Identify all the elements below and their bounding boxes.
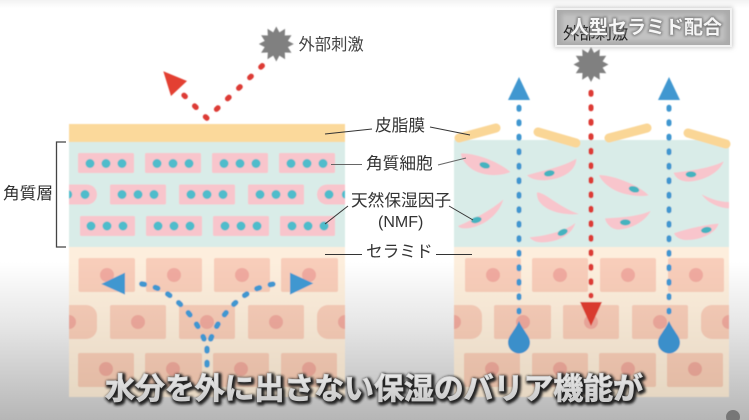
broken sebum pieces [459,128,726,144]
ceramide base layer [454,247,729,397]
label: sebum film: 皮脂膜 [375,116,425,135]
arrow: water escaping right [658,77,680,312]
label: external stimulus: 外部刺激 [298,36,364,54]
lower skin cells [69,258,345,387]
leader lines [325,127,473,254]
lower skin cells [454,258,729,387]
channel logo [726,410,740,420]
arrow: water escaping left [508,77,530,312]
badge: human-type ceramide: 外部刺激 [563,25,628,43]
ceramide base layer [69,247,345,397]
badge: human-type ceramide: 人型セラミド配合 [570,16,722,38]
caption: 水分を外に出さない保湿のバリア機能が [106,374,644,408]
icon: external stimulus star [259,26,294,62]
badge: human-type ceramide [554,7,733,48]
corneocyte cells with NMF dots [69,153,345,236]
stratum corneum layer [454,140,729,247]
arrow: external stimulus reflected [163,66,262,118]
panel shade [69,262,345,397]
panel shade [454,262,729,397]
label: corneocyte: 角質細胞 [366,154,433,173]
icon: external stimulus star right [574,47,608,82]
icon: water drop left [508,321,530,354]
panel: right skin diagram [454,47,729,397]
sebum layer [69,124,345,142]
label: NMF: (NMF) [378,214,423,231]
bracket: stratum corneum [56,142,66,247]
arrow: external stimulus entering [580,92,602,326]
bottom gradient background [0,262,749,420]
label: ceramide: セラミド [366,242,433,261]
arrow: water retained and spreading [101,273,313,365]
label: natural moisturizing factor: 天然保湿因子 [351,191,451,210]
stratum corneum layer [69,142,345,247]
top shade [0,0,749,8]
caption: 水分を外に出さない保湿のバリア機能が [105,372,643,406]
icon: water drop right [658,321,680,354]
damaged corneocyte cells [458,153,729,242]
badge: human-type ceramide: 人型セラミド配合 [570,16,722,38]
label: stratum corneum: 角質層 [3,184,53,203]
panel: left skin diagram [69,26,345,397]
